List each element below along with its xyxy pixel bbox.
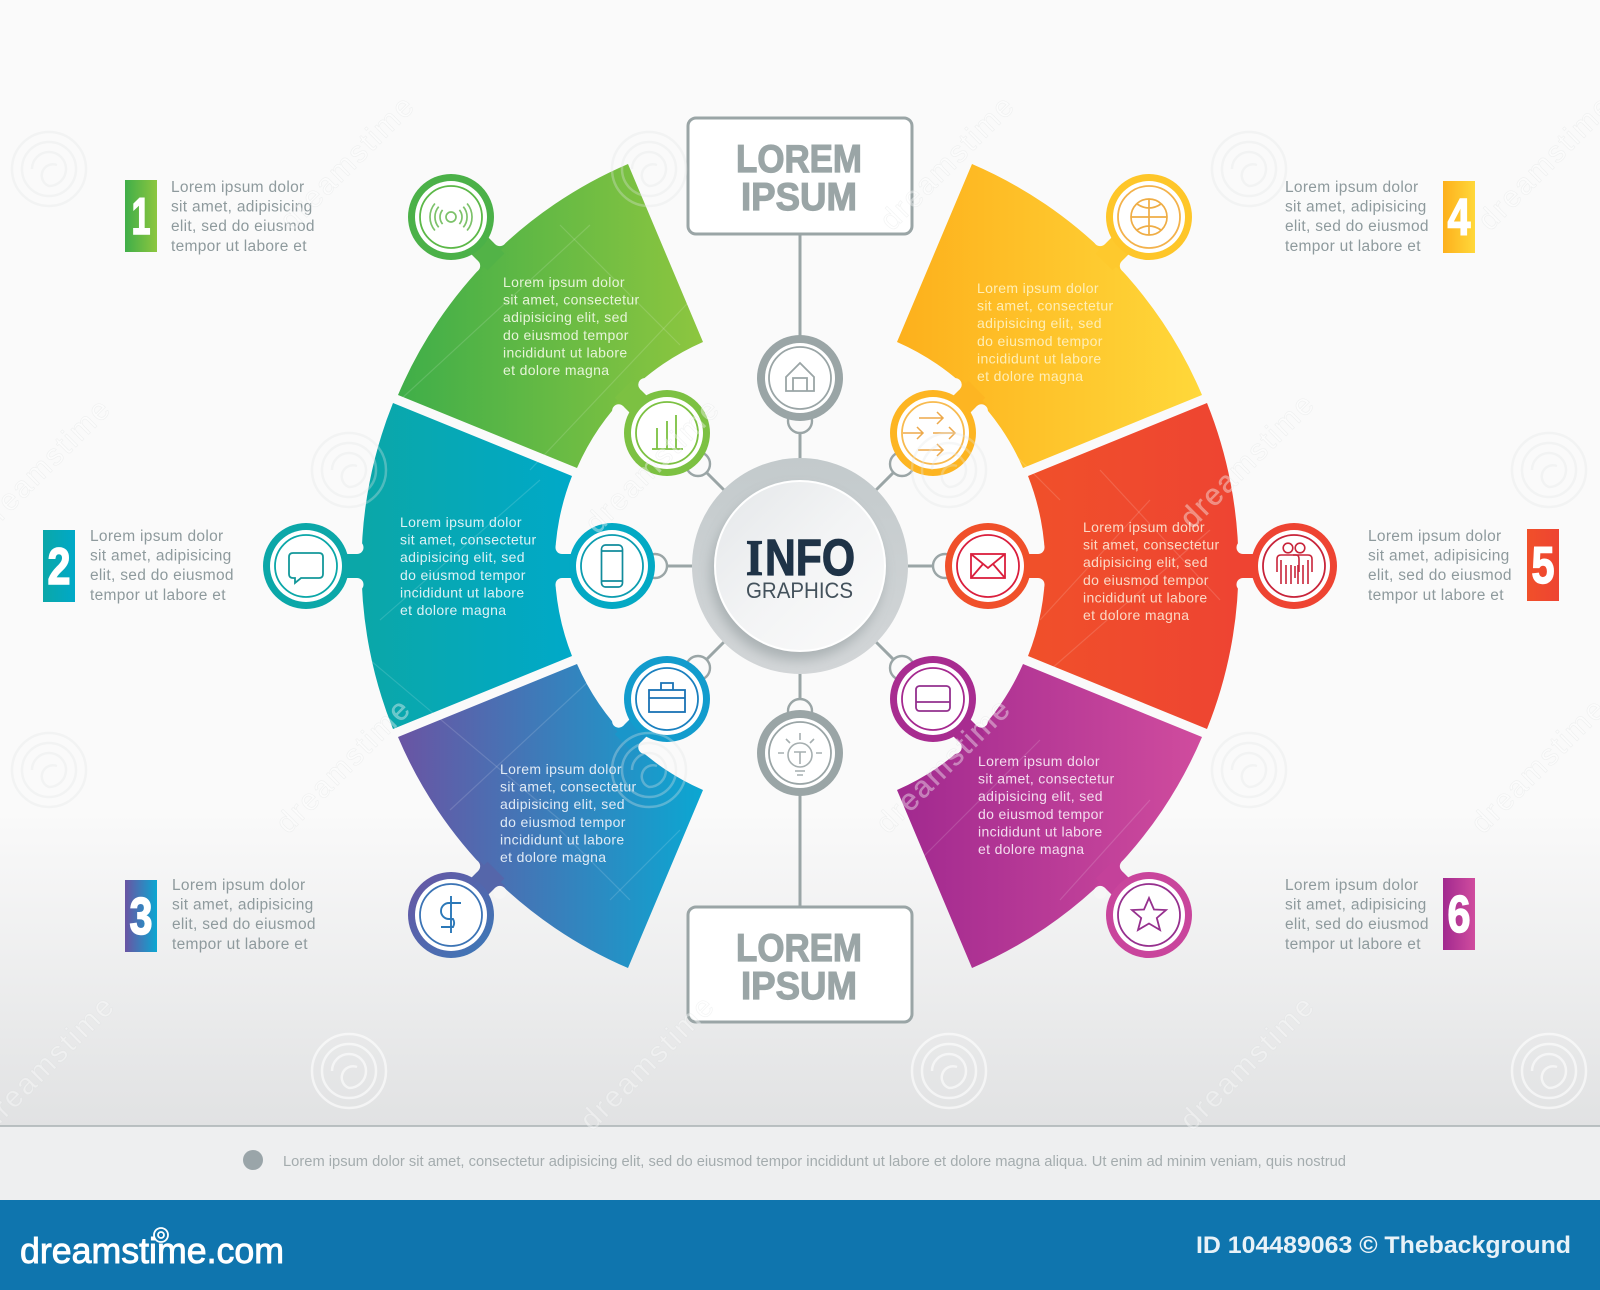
footer image id: ID 104489063 © Thebackground	[1196, 1232, 1571, 1259]
legend item 1: sit amet, adipisicing	[171, 199, 313, 216]
watermark spirals	[12, 132, 1586, 1108]
legend item 4: sit amet, adipisicing	[1285, 199, 1427, 216]
panel: segment 4 yellow	[897, 164, 1202, 468]
top label box: IPSUM	[741, 176, 857, 219]
legend item 3: 3	[130, 888, 152, 946]
segment text 1: et dolore magna	[503, 362, 609, 378]
segment text 4: Lorem ipsum dolor	[977, 280, 1099, 296]
segment text 6: incididunt ut labore	[978, 823, 1103, 839]
segment text 2: Lorem ipsum dolor	[400, 514, 522, 530]
legend item 3: sit amet, adipisicing	[172, 897, 314, 914]
watermark text: dreamstime	[579, 392, 727, 540]
legend item 5: 5	[1532, 537, 1554, 595]
segment text 6: do eiusmod tempor	[978, 806, 1104, 822]
legend item 5: elit, sed do eiusmod	[1368, 567, 1512, 584]
panel: segment 3 blue	[398, 664, 703, 968]
segment text 4: adipisicing elit, sed	[977, 315, 1102, 331]
segment text 5: sit amet, consectetur	[1083, 537, 1220, 553]
legend item 6	[1285, 877, 1475, 953]
segment text 5: do eiusmod tempor	[1083, 572, 1209, 588]
segment text 2: adipisicing elit, sed	[400, 549, 525, 565]
icon: chat bubble	[263, 523, 349, 609]
watermark text: dreamstime	[270, 692, 418, 840]
icon: smartphone	[569, 523, 655, 609]
legend item 2: Lorem ipsum dolor	[90, 528, 223, 545]
segment text 2: do eiusmod tempor	[400, 567, 526, 583]
segment text 6: adipisicing elit, sed	[978, 788, 1103, 804]
segment text 6: Lorem ipsum dolor	[978, 753, 1100, 769]
segment text 4: et dolore magna	[977, 368, 1083, 384]
segment text 3: et dolore magna	[500, 849, 606, 865]
legend item 5	[1368, 528, 1559, 604]
legend item 4: tempor ut labore et	[1285, 238, 1421, 255]
footnote bullet	[243, 1150, 263, 1170]
icon: laptop	[890, 656, 976, 742]
segment text 2: et dolore magna	[400, 602, 506, 618]
icon: arrows	[890, 390, 976, 476]
icon: basketball	[1106, 174, 1192, 260]
legend item 2: tempor ut labore et	[90, 587, 226, 604]
watermark text: dreamstime	[274, 89, 422, 237]
legend item 4	[1285, 179, 1475, 255]
legend item 3: elit, sed do eiusmod	[172, 916, 316, 933]
bottom label box: IPSUM	[741, 965, 857, 1008]
icon: people	[1251, 523, 1337, 609]
bottom label box	[688, 907, 912, 1022]
legend item 3: tempor ut labore et	[172, 936, 308, 953]
legend item 2: sit amet, adipisicing	[90, 548, 232, 565]
segment text 2: sit amet, consectetur	[400, 532, 537, 548]
hub subtitle GRAPHICS: GRAPHICS	[746, 578, 853, 603]
necks: segment 2	[300, 541, 620, 591]
segment text 1: incididunt ut labore	[503, 344, 628, 360]
watermark text: dreamstime	[870, 692, 1018, 840]
icon: star	[1106, 872, 1192, 958]
segment text 1: adipisicing elit, sed	[503, 309, 628, 325]
icon: house	[757, 335, 843, 421]
panel: segment 6 purple	[897, 664, 1202, 968]
legend item 5: Lorem ipsum dolor	[1368, 528, 1501, 545]
legend item 2: elit, sed do eiusmod	[90, 567, 234, 584]
legend item 5: tempor ut labore et	[1368, 587, 1504, 604]
segment text 3: adipisicing elit, sed	[500, 796, 625, 812]
legend item 1: elit, sed do eiusmod	[171, 218, 315, 235]
watermark text: dreamstime	[1174, 989, 1322, 1137]
segment text 5: incididunt ut labore	[1083, 589, 1208, 605]
panel: segment 5 red	[1028, 403, 1239, 729]
legend item 4: Lorem ipsum dolor	[1285, 179, 1418, 196]
icon: envelope	[945, 523, 1031, 609]
legend item 3	[125, 877, 316, 953]
segment text 1: do eiusmod tempor	[503, 327, 629, 343]
legend item 1	[125, 179, 315, 255]
watermark text: dreamstime	[874, 89, 1022, 237]
icon: dollar	[408, 872, 494, 958]
legend item 2	[43, 528, 234, 604]
footnote strip	[0, 1126, 1600, 1200]
segment text 3: incididunt ut labore	[500, 831, 625, 847]
top label box: LOREM	[736, 138, 862, 181]
segment text 6: sit amet, consectetur	[978, 771, 1115, 787]
segment text 5: et dolore magna	[1083, 607, 1189, 623]
central hub	[692, 458, 908, 674]
necks: segment 1	[429, 195, 690, 456]
watermark text: dreamstime	[1174, 387, 1322, 535]
necks: segment 4	[910, 195, 1171, 456]
necks: segment 5	[980, 541, 1300, 591]
legend item 6: 6	[1448, 886, 1470, 944]
segment text 6: et dolore magna	[978, 841, 1084, 857]
icon: bar chart	[624, 390, 710, 476]
panel: segment 1 green	[398, 164, 703, 468]
legend item 6: tempor ut labore et	[1285, 936, 1421, 953]
legend item 1: tempor ut labore et	[171, 238, 307, 255]
panel: segment 2 teal	[361, 403, 572, 729]
footnote text: Lorem ipsum dolor sit amet, consectetur adipisicing elit, sed do eiusmod tempor incididunt ut labore et dolore magna aliqua. Ut enim ad minim veniam, quis nostrud	[283, 1154, 1346, 1170]
legend item 2: 2	[48, 538, 70, 596]
bottom label box: LOREM	[736, 927, 862, 970]
segment text 3: do eiusmod tempor	[500, 814, 626, 830]
legend item 5: sit amet, adipisicing	[1368, 548, 1510, 565]
footer logo text: dreamstime.com	[20, 1230, 284, 1271]
legend item 1: 1	[132, 188, 150, 246]
segment text 4: do eiusmod tempor	[977, 333, 1103, 349]
connector joints	[643, 409, 957, 723]
icon: signal	[408, 174, 494, 260]
segment text 2: incididunt ut labore	[400, 584, 525, 600]
icon: briefcase	[624, 656, 710, 742]
legend item 1: Lorem ipsum dolor	[171, 179, 304, 196]
legend item 4: elit, sed do eiusmod	[1285, 218, 1429, 235]
legend item 6: Lorem ipsum dolor	[1285, 877, 1418, 894]
segment text 3: Lorem ipsum dolor	[500, 761, 622, 777]
legend item 6: elit, sed do eiusmod	[1285, 916, 1429, 933]
icon: light bulb	[757, 710, 843, 796]
legend item 3: Lorem ipsum dolor	[172, 877, 305, 894]
segment text 4: sit amet, consectetur	[977, 298, 1114, 314]
legend item 6: sit amet, adipisicing	[1285, 897, 1427, 914]
hub title INFO: NFO	[765, 529, 855, 586]
segment text 4: incididunt ut labore	[977, 350, 1102, 366]
segment text 5: Lorem ipsum dolor	[1083, 519, 1205, 535]
top label box	[688, 118, 912, 234]
connector stems from hub	[655, 234, 945, 906]
footer logo spiral	[154, 1228, 168, 1242]
segment text 3: sit amet, consectetur	[500, 779, 637, 795]
hub title INFO: I	[746, 531, 763, 587]
segment text 1: sit amet, consectetur	[503, 292, 640, 308]
segment text 1: Lorem ipsum dolor	[503, 274, 625, 290]
segment text 5: adipisicing elit, sed	[1083, 554, 1208, 570]
watermark text: dreamstime	[574, 989, 722, 1137]
footer band	[0, 1200, 1600, 1290]
necks: segment 3	[429, 676, 690, 937]
legend item 4: 4	[1448, 189, 1471, 247]
necks: segment 6	[910, 676, 1171, 937]
